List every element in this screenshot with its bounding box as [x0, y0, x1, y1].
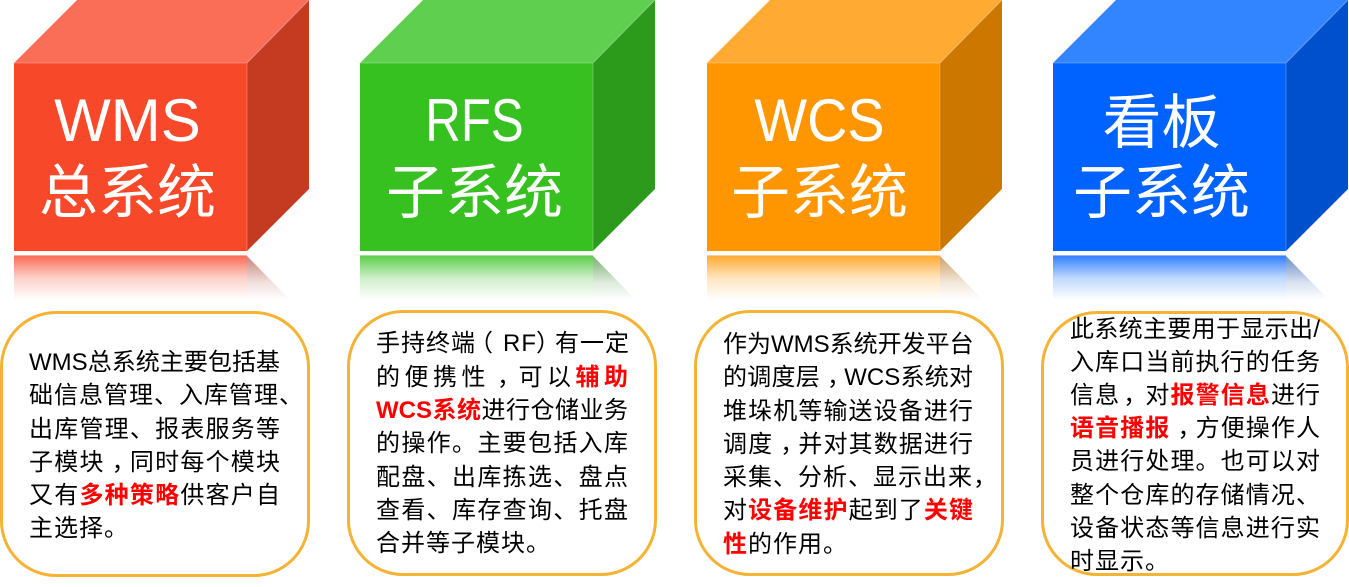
description text: WCS: 的调度层 ，WCS系统对 [723, 364, 973, 391]
description text: dashboard: 时显示。 [1070, 548, 1170, 575]
cube title: 子系统: 子系统 [1073, 160, 1250, 226]
cube title: 子系统: 子系统 [386, 160, 563, 226]
description text: RFS: （ [469, 330, 494, 357]
description text: WMS: WMS总系统主要包括基 [29, 349, 280, 376]
description text: WMS: 子模块 ，同时每个模块 [29, 449, 280, 476]
description text: RFS: ） [536, 330, 561, 357]
description text: RFS: 查看、库存查询、托盘 [376, 497, 628, 524]
description text: WMS: 又有多种策略供客户自 [29, 482, 280, 509]
description text: RFS: 有一定 [555, 330, 630, 357]
description card: WMS [0, 311, 310, 577]
description text: RFS: 合并等子模块。 [376, 530, 551, 557]
description text: WMS: 出库管理、报表服务等 [29, 416, 280, 443]
cube title: 子系统: 子系统 [731, 160, 908, 226]
description text: dashboard: 员进行处理。也可以对 [1070, 448, 1320, 475]
description text: dashboard: 信息，对报警信息进行 [1070, 382, 1320, 409]
description card: dashboard [1041, 311, 1349, 576]
cube title: 看板: 看板 [1102, 90, 1220, 156]
description text: dashboard [1070, 316, 1320, 575]
description text: WMS: 主选择。 [29, 515, 129, 542]
cube title: RFS: RFS [425, 87, 524, 154]
description text: WCS: 对设备维护起到了关键 [723, 497, 973, 524]
description text: dashboard: 此系统主要用于显示出/ [1070, 316, 1320, 343]
description text: WMS: 础信息管理、入库管理、 [29, 382, 303, 409]
description text: RFS: RF [503, 330, 537, 357]
description text: WCS: 堆垛机等输送设备进行 [723, 398, 973, 425]
description text: RFS: WCS系统进行仓储业务 [376, 397, 628, 424]
cube title: 总系统: 总系统 [39, 160, 216, 226]
description card: RFS [347, 310, 657, 576]
description text: RFS: 的便携性 ，可以辅助 [376, 364, 628, 391]
description text: RFS: 的操作。主要包括入库 [376, 430, 628, 457]
description text: dashboard: 整个仓库的存储情况、 [1070, 482, 1320, 509]
description text: dashboard: 入库口当前执行的任务 [1070, 349, 1320, 376]
cube title: WMS: WMS [54, 87, 201, 154]
description text: dashboard: 语音播报 ，方便操作人 [1070, 415, 1320, 442]
description text: dashboard: 设备状态等信息进行实 [1070, 515, 1320, 542]
description text: WCS: 调度 ，并对其数据进行 [723, 431, 973, 458]
description text: WCS: 作为WMS系统开发平台 [723, 331, 974, 358]
description text: WCS [723, 331, 997, 558]
description text: RFS [376, 330, 630, 557]
description text: RFS: 手持终端 [376, 330, 476, 357]
description text: WMS [29, 349, 303, 542]
description text: RFS: 配盘、出库拣选、盘点 [376, 464, 628, 491]
description card: WCS [694, 310, 1004, 576]
description text: WCS: 采集、分析、显示出来， [723, 464, 997, 491]
description text: WCS: 性的作用。 [723, 531, 848, 558]
cube title: WCS: WCS [754, 87, 885, 154]
